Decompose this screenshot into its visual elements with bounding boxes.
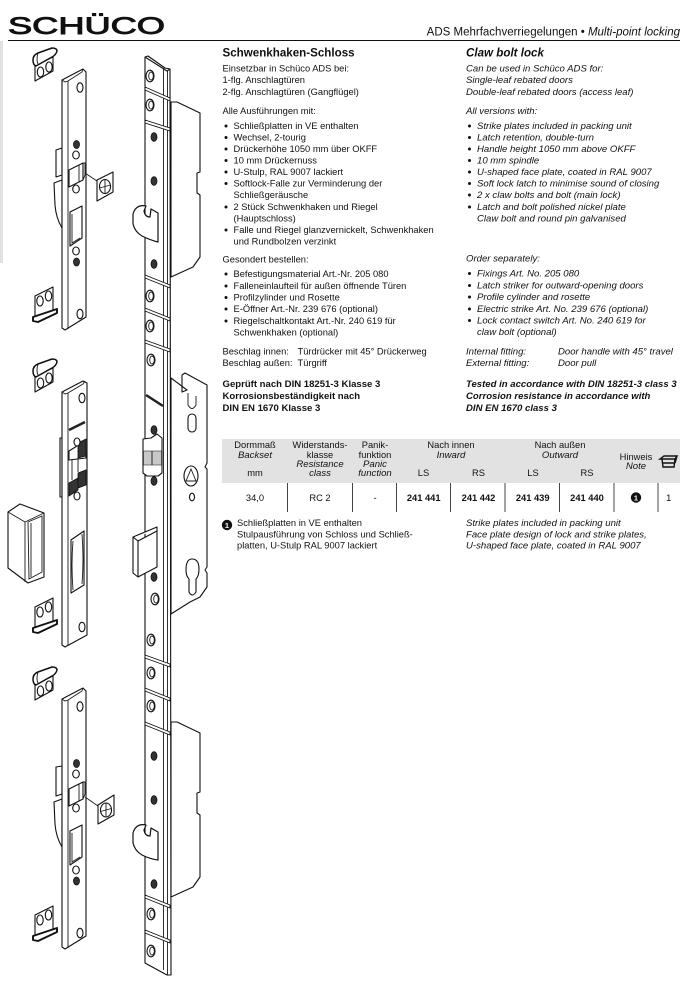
footnote: U-shaped face plate, coated in RAL 9007 (466, 540, 641, 552)
table header labels: Panik- (362, 440, 388, 450)
English description: Latch and bolt polished nickel plate (477, 202, 626, 213)
footnote: Strike plates included in packing unit (466, 518, 621, 529)
German description: Schließgeräusche (234, 190, 308, 200)
table header labels: Nach außen (535, 440, 585, 450)
table header labels: Panic (363, 459, 387, 470)
German description: Schließplatten in VE enthalten (234, 121, 358, 131)
English description: All versions with: (465, 106, 538, 117)
German description: Beschlag innen: (222, 346, 289, 356)
German description: Falleneinlaufteil für außen öffnende Türen (234, 281, 406, 291)
German description: Gesondert bestellen: (222, 254, 309, 264)
nameplate mark (146, 395, 163, 406)
German description: 10 mm Drückernuss (234, 156, 317, 166)
English description: 2 x claw bolts and bolt (main lock) (476, 190, 620, 201)
icon: packing box (660, 456, 677, 467)
table header labels: RS (472, 468, 485, 478)
table header labels: Inward (437, 450, 466, 461)
footnote: Schließplatten in VE enthalten (237, 518, 362, 528)
English description: Handle height 1050 mm above OKFF (477, 144, 637, 155)
English description: Latch striker for outward-opening doors (477, 280, 644, 292)
dead bolt (133, 527, 157, 577)
table header labels: RS (581, 468, 593, 478)
German description: Wechsel, 2-tourig (234, 132, 306, 142)
illustration: cylinder cover box (8, 504, 44, 583)
header rule (8, 40, 680, 41)
footnote (222, 518, 647, 552)
table data row (246, 492, 671, 503)
table header labels: Outward (542, 450, 579, 461)
German description: Riegelschaltkontakt Art.-Nr. 240 619 für (234, 316, 396, 326)
footnote: Face plate design of lock and strike plates, (466, 530, 647, 540)
table header labels: mm (247, 468, 263, 478)
table header labels: Backset (238, 450, 272, 461)
German description: 2-flg. Anschlagtüren (Gangflügel) (222, 87, 359, 97)
English description: Strike plates included in packing unit (477, 121, 632, 132)
German description: 1-flg. Anschlagtüren (222, 75, 305, 85)
product table (222, 439, 680, 512)
German description: Profilzylinder und Rosette (234, 292, 340, 302)
table data row: RC 2 (309, 493, 331, 503)
English description: Electric strike Art. No. 239 676 (optional) (477, 304, 648, 315)
German description: E-Öffner Art.-Nr. 239 676 (optional) (234, 304, 378, 314)
German heading: Schwenkhaken-Schloss (222, 46, 355, 60)
German description: Falle und Riegel glanzvernickelt, Schwenkhaken (234, 225, 434, 235)
table header labels: class (309, 468, 331, 479)
footnote marker: 1 (225, 521, 229, 530)
German description: und Rundbolzen verzinkt (234, 236, 337, 246)
English description: claw bolt (optional) (477, 327, 557, 338)
German description: Geprüft nach DIN 18251-3 Klasse 3 (222, 379, 380, 390)
table header labels (234, 440, 653, 479)
table data row: - (373, 493, 377, 503)
table data row: 241 440 (570, 493, 604, 503)
German description: Schwenkhaken (optional) (234, 328, 338, 338)
German description: Befestigungsmaterial Art.-Nr. 205 080 (234, 269, 389, 279)
table header labels: Resistance (296, 459, 344, 470)
English description: Door pull (558, 358, 597, 369)
German bullets (224, 124, 228, 322)
table header band (222, 439, 680, 483)
English description: DIN EN 1670 class 3 (466, 403, 558, 414)
German description: Türdrücker mit 45° Drückerweg (298, 346, 427, 356)
English description: Latch retention, double-turn (477, 132, 594, 144)
footnote: platten, U-Stulp RAL 9007 lackiert (237, 540, 378, 550)
English description: Claw bolt and round pin galvanised (477, 214, 627, 224)
table data row: 241 439 (516, 493, 550, 503)
German description: U-Stulp, RAL 9007 lackiert (234, 167, 343, 177)
English heading: Claw bolt lock (466, 46, 544, 60)
table header labels: function (358, 468, 392, 479)
footnote marker (222, 520, 232, 530)
table header labels: funktion (359, 450, 391, 460)
German description: DIN EN 1670 Klasse 3 (222, 403, 320, 414)
illustration: strike plate set, middle (33, 359, 87, 647)
English description: Door handle with 45° travel (558, 346, 674, 358)
footnote: Stulpausführung von Schloss und Schließ- (237, 530, 413, 540)
German description: Beschlag außen: (222, 358, 293, 368)
English description: Internal fitting: (466, 346, 526, 358)
illustration: multi-point lock (133, 56, 207, 975)
face plate holes (146, 70, 159, 957)
English description: 10 mm spindle (477, 156, 539, 166)
German description: Alle Ausführungen mit: (222, 106, 316, 116)
English description: Lock contact switch Art. No. 240 619 for (477, 316, 646, 326)
table data row: 241 441 (407, 493, 441, 503)
German description: Korrosionsbeständigkeit nach (222, 391, 360, 402)
table column dividers (288, 483, 658, 512)
German description: Drückerhöhe 1050 mm über OKFF (234, 144, 377, 154)
table header labels: Widerstands- (293, 440, 347, 450)
English description: Order separately: (466, 254, 540, 264)
English description: Profile cylinder and rosette (477, 292, 590, 303)
side strip (0, 41, 3, 263)
German description: 2 Stück Schwenkhaken und Riegel (234, 202, 378, 212)
English description: Single-leaf rebated doors (466, 75, 573, 86)
table data row: 1 (634, 494, 638, 502)
face plate joints (145, 87, 170, 943)
table data row: 1 (666, 493, 671, 503)
latch (143, 434, 162, 476)
German description (222, 46, 434, 414)
English description (465, 46, 677, 414)
English description: External fitting: (466, 358, 530, 369)
table header labels: Dormmaß (234, 440, 276, 450)
English description: Tested in accordance with DIN 18251-3 class 3 (466, 379, 677, 390)
table header labels: LS (418, 468, 429, 478)
English bullets (468, 124, 471, 322)
claw bolts (133, 206, 158, 860)
German description: Einsetzbar in Schüco ADS bei: (222, 64, 349, 74)
table header labels: Nach innen (427, 440, 475, 450)
illustration: strike plate set, top (33, 48, 113, 330)
English description: Corrosion resistance in accordance with (466, 391, 651, 402)
illustration: strike plate set, bottom (33, 667, 114, 949)
table header labels: Hinweis (620, 452, 653, 462)
English description: Soft lock latch to minimise sound of closing (477, 178, 660, 190)
English description: U-shaped face plate, coated in RAL 9007 (477, 167, 652, 178)
table header labels: Note (626, 461, 646, 472)
English description: Can be used in Schüco ADS for: (466, 64, 604, 74)
table data row: 34,0 (246, 493, 264, 503)
logo: Schüco: SCHÜCO (8, 13, 165, 40)
English description: Double-leaf rebated doors (access leaf) (466, 87, 633, 98)
header title: ADS Mehrfachverriegelungen • Multi-point locking (427, 26, 681, 38)
German description: Türgriff (298, 358, 327, 368)
table data row: 241 442 (462, 493, 495, 503)
table header labels: LS (527, 468, 539, 478)
table header labels: klasse (307, 450, 333, 460)
main lock case (171, 373, 207, 614)
German description: (Hauptschloss) (234, 214, 296, 224)
German description: Softlock-Falle zur Verminderung der (234, 178, 382, 188)
English description: Fixings Art. No. 205 080 (477, 268, 580, 280)
